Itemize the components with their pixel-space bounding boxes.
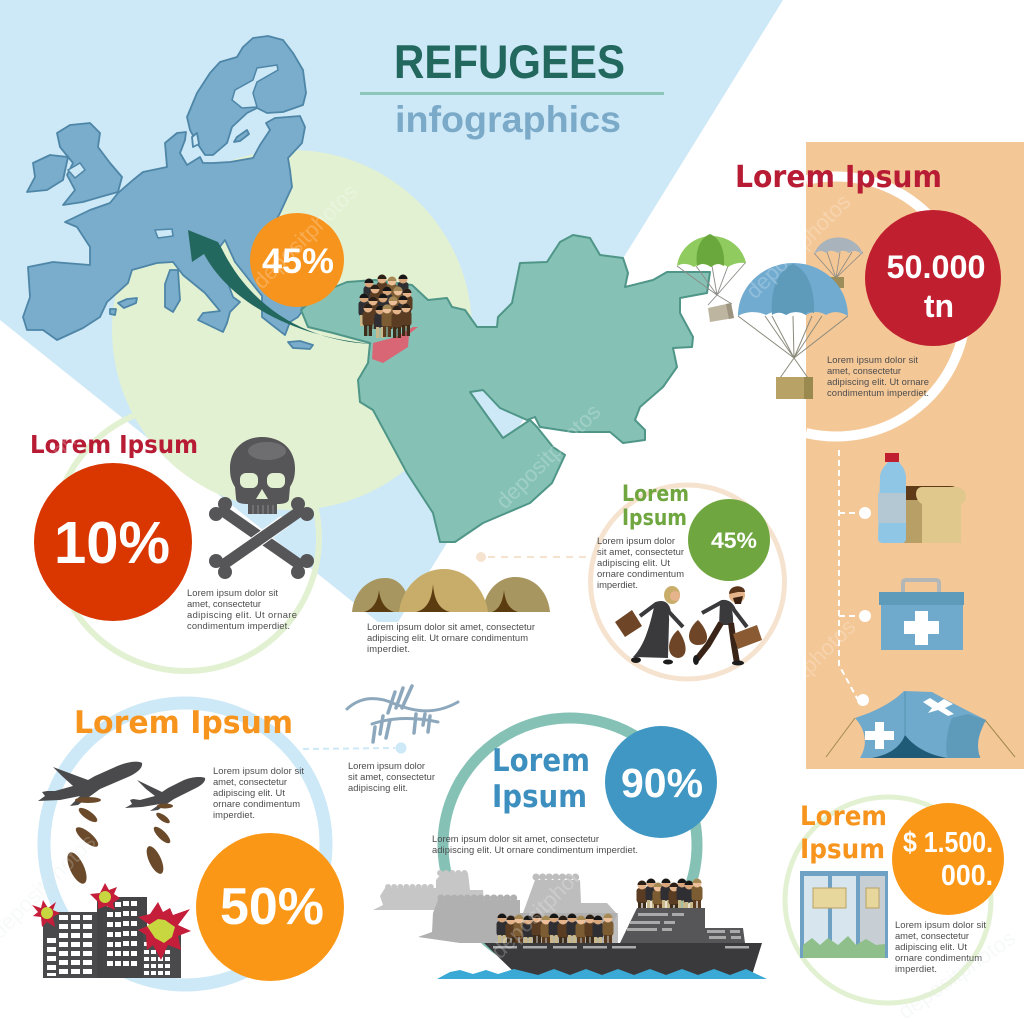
panel: 45% displaced people (590, 482, 784, 679)
heading line two: Ipsum (800, 834, 885, 865)
icon: bombed buildings (32, 883, 191, 978)
watermark text: depositphotos (486, 849, 600, 964)
icon: bomber plane small (125, 777, 205, 811)
text: ornare condimentum (213, 798, 300, 809)
icon: blue parachute with box (738, 263, 848, 399)
heading line two: Ipsum (492, 779, 587, 815)
icon: refugee camp tents (352, 569, 550, 612)
icon: fleeing woman (615, 586, 686, 664)
title: REFUGEES (394, 35, 625, 88)
ring (44, 703, 326, 985)
text: barbed wire description: Lorem ipsum dolor (348, 760, 425, 771)
icon: first aid kit (879, 580, 964, 650)
icon: people on deck (496, 878, 702, 948)
heading: Lorem (800, 801, 887, 832)
stat circle (605, 726, 717, 838)
icon: ship (437, 908, 767, 979)
text: tents description: imperdiet. (367, 643, 410, 654)
text: parachute description: adipiscing elit. Ut ornare (827, 376, 929, 387)
title (360, 35, 664, 140)
arrow: migration to Europe (188, 230, 373, 344)
stat circle: 90% (621, 760, 703, 806)
heading: Lorem Ipsum (30, 430, 198, 459)
text: condimentum imperdiet. (187, 620, 290, 631)
text: imperdiet. (597, 579, 638, 590)
stat circle: $ 1.500. (903, 827, 993, 859)
text: parachute description: Lorem ipsum dolor sit (827, 354, 918, 365)
stat circle: 000. (941, 860, 993, 892)
text: adipiscing elit. Ut ornare condimentum imperdiet. (432, 844, 638, 855)
icon: grey ship silhouettes (373, 873, 618, 945)
heading: top right: Lorem Ipsum (735, 160, 942, 195)
stat circle (892, 803, 1004, 915)
ring (53, 405, 319, 671)
panel: 10% deaths (30, 405, 319, 671)
ring (590, 485, 784, 679)
stat circle: 45% (711, 528, 757, 553)
text: sit amet, consectetur (597, 546, 684, 557)
connector: dashed supply line (839, 450, 860, 700)
text: adipiscing elit. Ut (597, 557, 670, 568)
icon: skull and crossbones (209, 437, 314, 579)
panel: peach supplies panel (806, 142, 1024, 769)
stat circle (196, 833, 344, 981)
text: Lorem ipsum dolor sit (213, 765, 304, 776)
text: barbed wire description: sit amet, consectetur (348, 771, 435, 782)
icon: fleeing man (689, 586, 762, 666)
stat circle: 10% (54, 510, 170, 576)
map: Europe inland lakes and gulfs (68, 65, 278, 238)
panel ring: white ring in peach panel (806, 176, 966, 436)
icon: grey parachute (814, 237, 863, 288)
title: infographics (395, 99, 621, 140)
text: barbed wire description: adipiscing elit. (348, 782, 408, 793)
watermark text: depositphotos (894, 925, 1020, 1024)
icon: falling bombs (63, 805, 173, 886)
text: parachute description: amet, consectetur (827, 365, 901, 376)
heading: Lorem (492, 743, 590, 779)
icon: bomber plane large (38, 762, 142, 806)
text: adipiscing elit. Ut (895, 941, 967, 952)
connector: tents to panel (476, 552, 596, 562)
text: Lorem ipsum dolor (597, 535, 675, 546)
watermark text: depositphotos (491, 399, 605, 514)
heading: Lorem (622, 482, 689, 507)
text: Lorem ipsum dolor sit amet, consectetur (432, 833, 599, 844)
icon: medical tent (826, 691, 1015, 758)
text: Lorem ipsum dolor sit (895, 919, 986, 930)
text: amet, consectetur (895, 930, 969, 941)
icon: barbed wire (347, 686, 458, 742)
stat circle: 45% to Europe (250, 213, 344, 307)
heading: Lorem Ipsum (74, 705, 293, 741)
map: Middle East (301, 235, 710, 542)
text: imperdiet. (895, 963, 937, 974)
stat circle (34, 463, 192, 621)
text: Lorem ipsum dolor sit (187, 587, 278, 598)
stat circle: 50.000 tn (865, 210, 1001, 346)
text: adipiscing elit. Ut ornare (187, 609, 297, 620)
icon: water bottle and bread (878, 453, 966, 543)
watermark text: depositphotos (741, 189, 855, 304)
heading line two: Ipsum (622, 506, 687, 531)
icon: donation boxes (800, 871, 888, 958)
text: amet, consectetur (187, 598, 261, 609)
map: Europe (23, 36, 313, 349)
panel: 50% bombing (32, 703, 344, 985)
ring (443, 718, 697, 972)
panel: 1.500.000 funds (785, 797, 1004, 1003)
text: amet, consectetur (213, 776, 287, 787)
watermark text: depositphotos (746, 614, 860, 729)
stat circle: 50.000 tn: 50.000 (886, 249, 986, 285)
connector dots (857, 507, 871, 706)
background: pale green circle (112, 150, 472, 510)
watermark text: depositphotos (248, 179, 362, 294)
text: parachute description: condimentum imperdiet. (827, 387, 929, 398)
text: imperdiet. (213, 809, 255, 820)
text: adipiscing elit. Ut (213, 787, 285, 798)
stat circle: 50.000 tn: tn (924, 288, 954, 324)
background: light blue diagonal band (0, 0, 783, 622)
text: ornare condimentum (597, 568, 684, 579)
icon: green parachute (677, 234, 746, 322)
ring (785, 797, 991, 1003)
stat circle (688, 499, 770, 581)
stat circle: 45% to Europe: 45% (262, 242, 334, 281)
stat circle: 50% (220, 878, 324, 936)
text: ornare condimentum (895, 952, 982, 963)
text: tents description: adipiscing elit. Ut ornare condimentum (367, 632, 528, 643)
panel: 90% boat refugees (373, 718, 767, 979)
connector: barbed wire link (303, 742, 406, 754)
text: tents description: Lorem ipsum dolor sit amet, consectetur (367, 621, 535, 632)
map: Syria highlighted (372, 327, 418, 363)
icon: refugee crowd (358, 274, 412, 338)
